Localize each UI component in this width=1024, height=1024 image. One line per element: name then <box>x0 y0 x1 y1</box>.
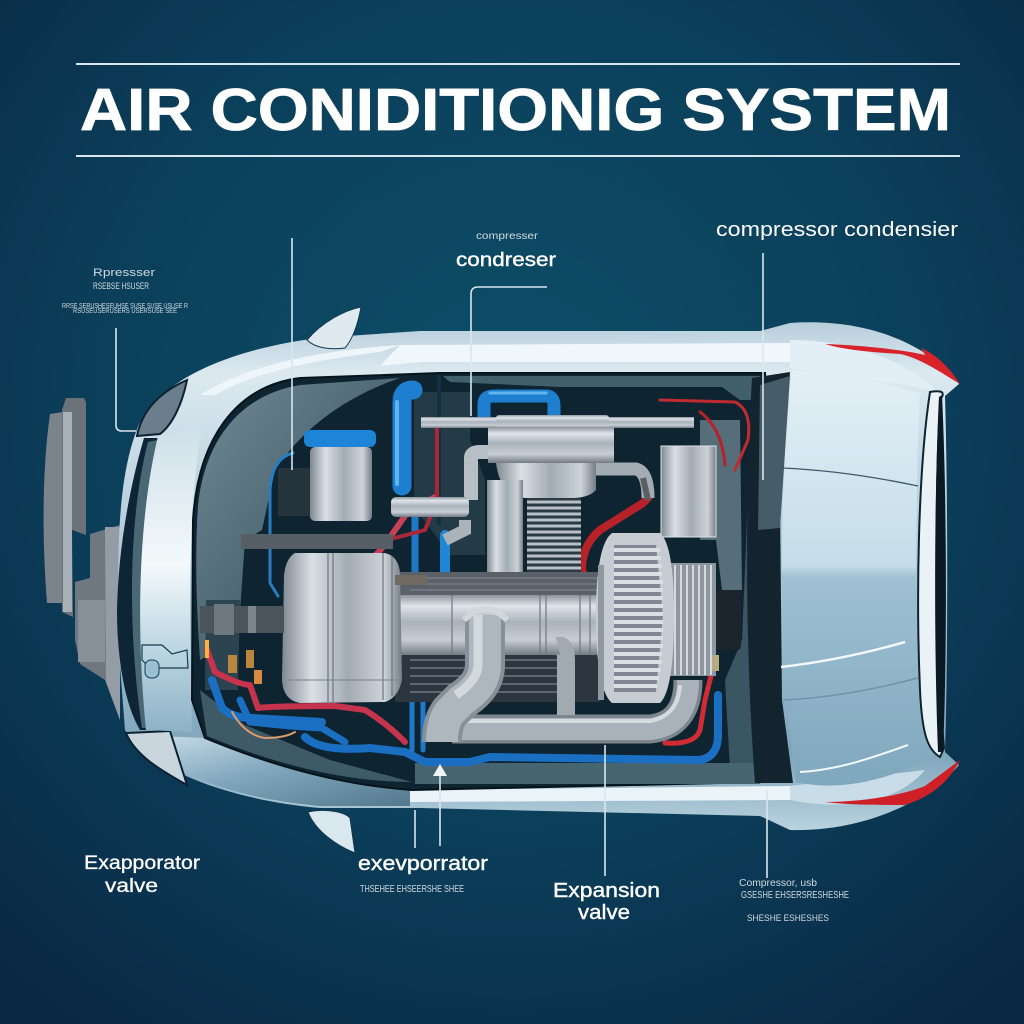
valve fittings <box>205 575 719 684</box>
label: expansion valve: Expansion <box>553 880 660 902</box>
main tube <box>398 595 603 655</box>
compressor cylinder <box>487 480 523 572</box>
headlight top <box>137 380 187 436</box>
fin block behind main tube <box>395 572 600 702</box>
label: exevporrator <box>358 853 488 895</box>
label: bottom-right note: Compressor, usb <box>739 878 817 889</box>
mirror bottom <box>308 810 355 853</box>
title block: AIR CONIDITIONIG SYSTEM <box>80 77 951 143</box>
label: condreser <box>456 231 557 271</box>
interior cavity <box>192 373 765 790</box>
windshield glass <box>196 378 400 660</box>
front radiator assembly <box>44 398 120 720</box>
bottom blue run <box>212 680 718 762</box>
label: bottom-right note: SHESHE ESHESHES <box>747 913 829 923</box>
tail light bottom <box>825 760 960 805</box>
right receiver tank <box>661 446 716 537</box>
label: condreser: compresser <box>476 231 539 242</box>
label: bottom-right note <box>739 878 849 923</box>
label: expansion valve <box>553 880 660 924</box>
label: expansion valve: valve <box>578 902 630 924</box>
body shell <box>118 322 959 830</box>
tail light top <box>825 344 960 384</box>
label: bottom-right note: GSESHE EHSERSRESHESHE <box>741 890 849 901</box>
label: exevporrator: exevporrator <box>358 853 488 875</box>
nose dark strip <box>117 438 158 730</box>
arrowhead <box>433 764 447 776</box>
blue cap <box>304 430 376 447</box>
upper manifold pipes <box>391 417 694 540</box>
blower wheel <box>596 533 741 703</box>
elbow pipe <box>442 609 507 742</box>
small bypass elbow <box>558 646 566 715</box>
label: top-left note: RSUSEUSERUSERS USERSUSE SEE <box>73 308 177 315</box>
label: top-left note <box>62 267 188 315</box>
label: top-left note: Rpressser <box>93 267 155 279</box>
rear hood panel <box>747 344 960 805</box>
red hoses <box>346 497 435 573</box>
top blue arch <box>484 396 554 415</box>
label: condreser: condreser <box>456 250 557 271</box>
side fin pack <box>668 563 716 676</box>
rear upper flank <box>790 340 938 392</box>
blue and red coolant lines <box>207 390 749 762</box>
leader lines <box>116 238 767 878</box>
lower sill <box>130 735 410 806</box>
bay walls <box>443 376 760 400</box>
nose white panel <box>140 428 202 732</box>
headlight bottom <box>126 731 187 785</box>
thin blue hose <box>270 453 293 596</box>
label: exevporrator: THSEHEE EHSEERSHE SHEE <box>360 884 464 895</box>
rear window <box>918 391 944 757</box>
left receiver drier <box>278 430 376 521</box>
dark side bar <box>241 534 393 549</box>
car body <box>117 307 959 853</box>
label: exapporator valve: Exapporator <box>84 853 201 874</box>
label: compressor condensier: compressor condensier <box>716 219 958 241</box>
label: exapporator valve <box>84 853 201 897</box>
ribbed stem <box>527 498 581 574</box>
label: exapporator valve: valve <box>105 876 158 897</box>
sill highlight <box>410 786 790 802</box>
left blue riser <box>402 390 413 486</box>
compressor head <box>487 415 614 595</box>
label: top-left note: RSEBSE HSUSER <box>93 281 149 291</box>
large evaporator drum <box>282 553 402 703</box>
label: top-left note: RRSE SERUSHESEUHSE SUSE SUSE USUSE R <box>62 303 188 310</box>
bottom return pipe <box>452 680 688 729</box>
shaft <box>200 604 284 635</box>
bright roof stripe <box>380 343 790 366</box>
mirror top <box>307 307 361 349</box>
